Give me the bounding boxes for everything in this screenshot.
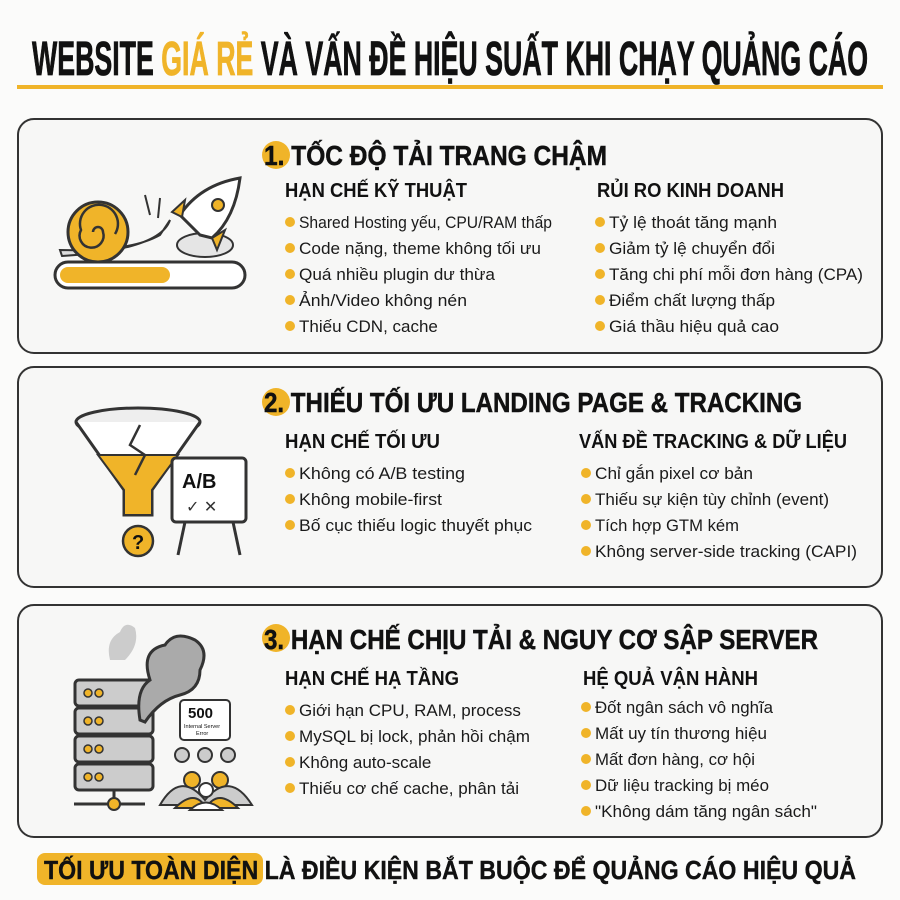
column: business risks: RỦI RO KINH DOANH [597, 178, 784, 202]
column: operational consequences: Dữ liệu tracking bị méo [595, 776, 769, 795]
column: technical limits: Shared Hosting yếu, CPU/RAM thấp [299, 213, 552, 232]
column: business risks: Giảm tỷ lệ chuyển đổi [609, 239, 775, 258]
panel: landing page & tracking [18, 367, 882, 587]
column: business risks: Điểm chất lượng thấp [609, 291, 775, 310]
column: operational consequences: Mất uy tín thương hiệu [595, 724, 767, 743]
column: business risks: Giá thầu hiệu quả cao [609, 317, 779, 336]
column: tracking problems: Thiếu sự kiện tùy chỉnh (event) [595, 490, 829, 509]
panel: server load [18, 605, 882, 837]
heading 2: 2. THIẾU TỐI ƯU LANDING PAGE & TRACKING [264, 386, 802, 418]
column: tracking problems: VẤN ĐỀ TRACKING & DỮ LIỆU [579, 429, 847, 453]
icon: server with smoke and users: 500 [188, 705, 213, 722]
column: infrastructure limits: Không auto-scale [299, 753, 431, 772]
heading 1: 1. TỐC ĐỘ TẢI TRANG CHẬM [264, 139, 607, 171]
column: technical limits: Ảnh/Video không nén [299, 291, 467, 310]
icon: funnel and A/B board: ? [132, 532, 144, 554]
column: operational consequences: Mất đơn hàng, cơ hội [595, 750, 755, 769]
icon: funnel and A/B board: ✓ ✕ [186, 499, 217, 516]
panel: slow loading [18, 119, 882, 353]
column: technical limits [285, 178, 552, 336]
column: infrastructure limits [285, 667, 530, 798]
icon: server with smoke and users [74, 625, 252, 810]
column: optimization limits: Không có A/B testing [299, 464, 465, 483]
icon: funnel and A/B board [76, 408, 246, 556]
column: technical limits: HẠN CHẾ KỸ THUẬT [285, 178, 467, 202]
column: optimization limits [285, 429, 533, 535]
column: technical limits: Code nặng, theme không tối ưu [299, 239, 541, 258]
heading 3: 3. HẠN CHẾ CHỊU TẢI & NGUY CƠ SẬP SERVER [264, 623, 818, 655]
column: infrastructure limits: HẠN CHẾ HẠ TẦNG [285, 667, 459, 690]
column: optimization limits: Bố cục thiếu logic thuyết phục [299, 516, 533, 535]
column: tracking problems: Tích hợp GTM kém [595, 516, 739, 535]
column: technical limits: Quá nhiều plugin dư thừa [299, 265, 496, 284]
column: operational consequences: HỆ QUẢ VẬN HÀNH [583, 666, 758, 690]
column: business risks: Tỷ lệ thoát tăng mạnh [609, 213, 777, 232]
icon: snail and rocket [55, 178, 245, 288]
column: technical limits: Thiếu CDN, cache [299, 317, 438, 336]
column: tracking problems [579, 429, 857, 561]
column: operational consequences: Đốt ngân sách vô nghĩa [595, 698, 774, 717]
column: tracking problems: Không server-side tracking (CAPI) [595, 542, 857, 561]
column: optimization limits: HẠN CHẾ TỐI ƯU [285, 429, 440, 453]
icon: funnel and A/B board: A/B [182, 471, 216, 493]
column: infrastructure limits: Thiếu cơ chế cache, phân tải [299, 779, 519, 798]
column: operational consequences: "Không dám tăng ngân sách" [595, 802, 817, 821]
column: business risks [595, 178, 863, 336]
column: operational consequences [581, 666, 817, 821]
icon: server with smoke and users: Error [196, 731, 208, 737]
column: infrastructure limits: Giới hạn CPU, RAM, process [299, 701, 521, 720]
column: business risks: Tăng chi phí mỗi đơn hàng (CPA) [609, 265, 863, 284]
column: infrastructure limits: MySQL bị lock, phản hồi chậm [299, 727, 530, 746]
column: optimization limits: Không mobile-first [299, 490, 442, 509]
column: tracking problems: Chỉ gắn pixel cơ bản [595, 464, 753, 483]
icon: server with smoke and users: Internal Server [184, 724, 220, 730]
